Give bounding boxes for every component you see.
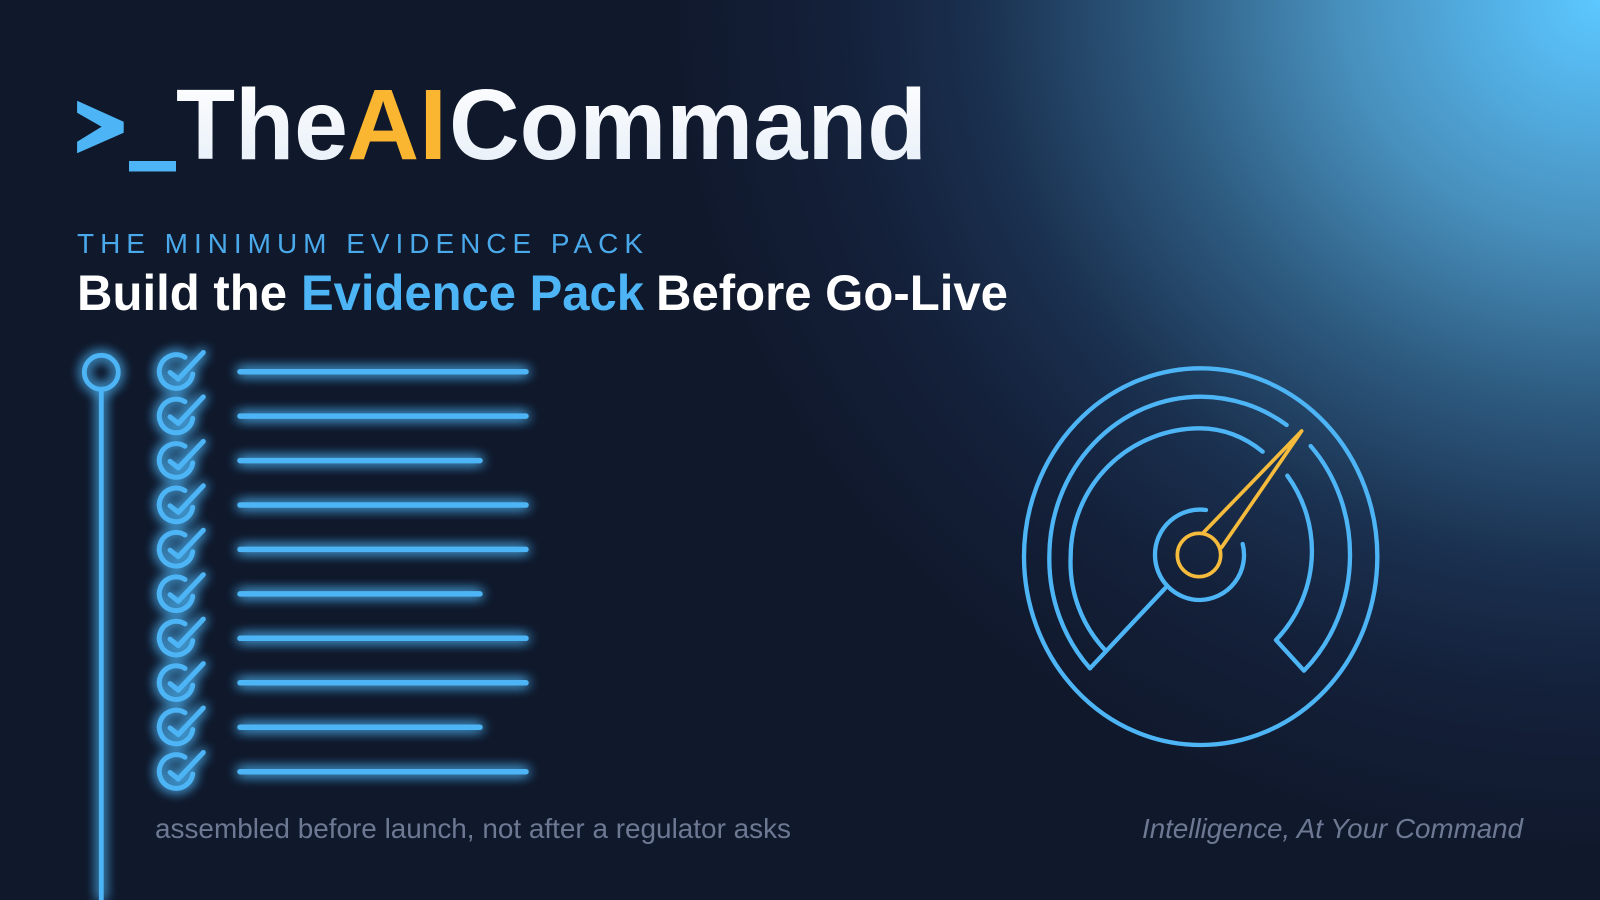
footnote: assembled before launch, not after a regulator asks [155,813,791,844]
gauge outer ring [1024,368,1377,745]
icon: terminal prompt [77,101,176,172]
row 2 [159,397,526,433]
row 1 [159,352,526,388]
row 8 [159,664,526,699]
headline part: before go-live: Before Go-Live [656,265,1008,321]
row 7 [159,619,526,655]
logo word: Command: Command [449,69,927,181]
gauge scale arcs [1049,397,1350,671]
logo word: AI: AI [347,69,447,181]
row 4 [159,486,526,522]
logo [77,69,927,181]
gauge needle [1177,431,1302,577]
icon: speedometer gauge [1024,368,1377,745]
logo word: The: The [176,69,348,181]
row 10 [159,752,526,788]
row 9 [159,708,480,744]
row 6 [159,575,480,611]
headline [77,265,1008,321]
checklist [159,352,526,788]
headline part: evidence pack: Evidence Pack [301,265,644,321]
timeline rail [84,355,118,900]
headline part: build the: Build the [77,265,287,321]
eyebrow: THE MINIMUM EVIDENCE PACK [77,228,643,259]
row 3 [159,441,480,477]
row 5 [159,530,526,566]
tagline: Intelligence, At Your Command [1142,813,1524,844]
